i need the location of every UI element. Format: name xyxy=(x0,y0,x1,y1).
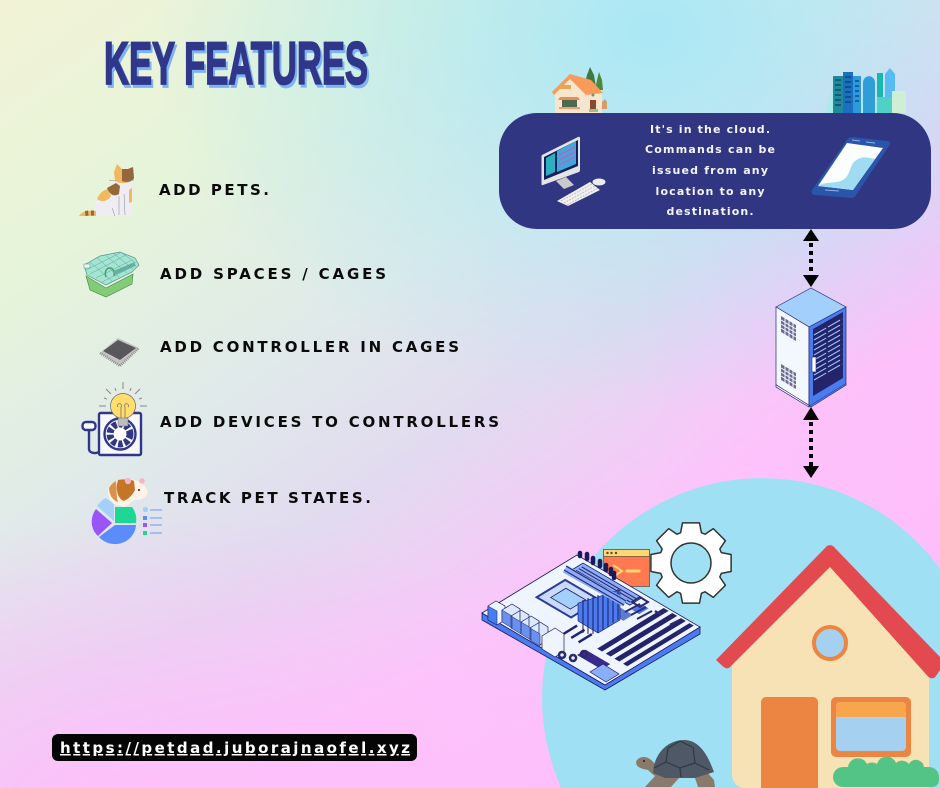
text block: destination. xyxy=(666,205,754,218)
bush xyxy=(833,757,939,787)
label: TRACK PET STATES. xyxy=(164,489,371,507)
label: ADD CONTROLLER IN CAGES xyxy=(160,338,459,356)
text block: location to any xyxy=(656,185,764,198)
icon: tortoise xyxy=(636,740,715,787)
icon: gear xyxy=(651,523,731,603)
icon: pie chart with guinea pig xyxy=(92,478,162,544)
title: KEY FEATURES xyxy=(106,33,370,100)
title xyxy=(104,30,370,100)
label: ADD SPACES / CAGES xyxy=(160,265,386,283)
icon: smartphone xyxy=(812,137,890,198)
feature: add pets xyxy=(79,164,269,216)
url badge: https://petdad.juborajnaofel.xyz xyxy=(60,739,410,757)
icon: fan with light bulb xyxy=(82,382,147,455)
icon: cat xyxy=(79,164,134,216)
icon: cage xyxy=(84,252,139,297)
panel: cloud xyxy=(499,113,931,229)
text block: It's in the cloud. xyxy=(650,123,770,136)
feature: add devices xyxy=(82,382,499,455)
label: ADD DEVICES TO CONTROLLERS xyxy=(160,413,499,431)
feature: add controller xyxy=(100,338,459,366)
title: KEY FEATURES xyxy=(104,30,368,97)
arrow: panel to server xyxy=(803,229,819,287)
icon: city skyline xyxy=(825,68,907,113)
label: ADD PETS. xyxy=(159,181,269,199)
house body xyxy=(732,567,929,788)
background circle xyxy=(542,478,940,788)
icon: desktop computer xyxy=(542,137,606,206)
front window xyxy=(831,697,911,757)
text block: Commands can be xyxy=(645,143,775,156)
icon: motherboard xyxy=(482,553,700,690)
icon: terminal window xyxy=(604,550,650,586)
text block xyxy=(645,123,775,218)
door xyxy=(761,697,818,788)
house xyxy=(716,545,940,788)
house roof xyxy=(716,545,940,678)
text block: issued from any xyxy=(652,164,768,177)
icon: server rack xyxy=(776,288,846,407)
feature: track pet states xyxy=(92,478,371,544)
arrow: server to home xyxy=(803,407,819,478)
url badge xyxy=(52,734,417,761)
round window xyxy=(814,627,846,659)
icon: chip xyxy=(100,338,139,366)
feature: add spaces xyxy=(84,252,386,297)
icon: small house xyxy=(552,67,607,113)
